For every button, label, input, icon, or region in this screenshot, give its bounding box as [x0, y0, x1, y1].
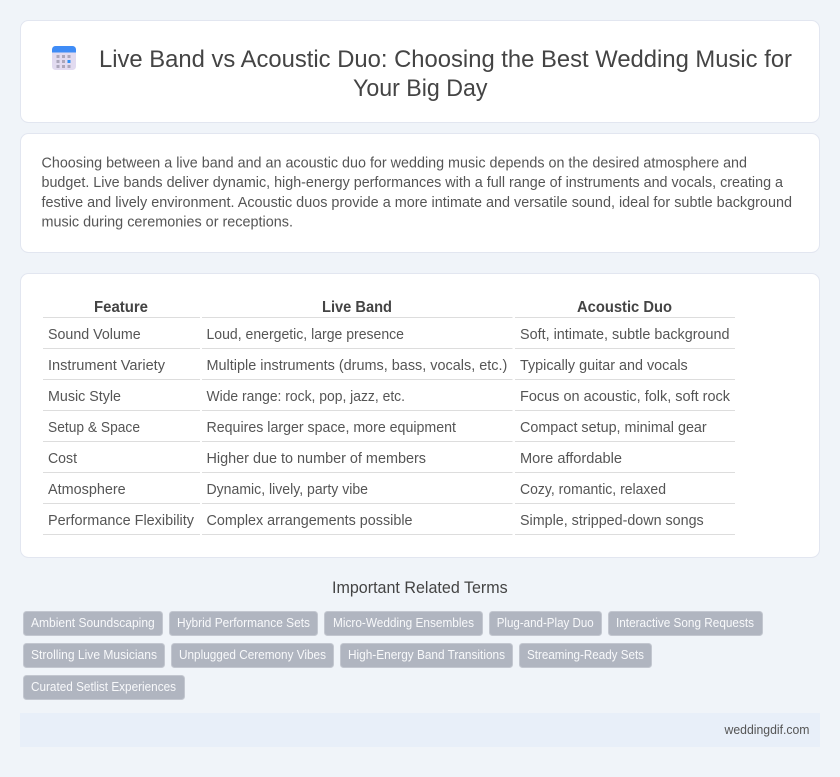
tag: strolling live musicians — [24, 644, 164, 668]
table row: music style: Focus on acoustic, folk, soft rock — [520, 389, 731, 405]
table row: cost: Cost — [48, 451, 77, 467]
table row: music style: Music Style — [48, 389, 121, 405]
tag: high-energy band transitions — [340, 644, 512, 668]
table row: setup and space — [48, 420, 707, 436]
table row: performance flexibility: Complex arrangements possible — [206, 513, 412, 529]
panel: comparison table — [20, 274, 820, 558]
title: Your Big Day — [353, 75, 488, 102]
table row: music style: Wide range: rock, pop, jazz, etc. — [206, 389, 405, 405]
table row: atmosphere: Atmosphere — [48, 482, 126, 498]
tag: curated setlist experiences — [24, 676, 184, 700]
table row: instrument variety: Instrument Variety — [48, 358, 166, 374]
table row: setup and space: Compact setup, minimal gear — [520, 420, 707, 436]
tag: micro-wedding ensembles: Micro-Wedding Ensembles — [333, 616, 474, 630]
tag: streaming-ready sets: Streaming-Ready Sets — [527, 648, 644, 662]
tag: hybrid performance sets: Hybrid Performance Sets — [177, 616, 310, 630]
tag: plug-and-play duo: Plug-and-Play Duo — [497, 616, 594, 630]
tag: hybrid performance sets — [170, 612, 318, 636]
text block: introduction paragraph: music during ceremonies or receptions. — [42, 214, 293, 230]
table header row: Acoustic Duo — [577, 299, 672, 316]
footer source text: weddingdif.com — [724, 723, 810, 737]
text block: introduction paragraph: budget. Live bands deliver dynamic, high-energy performances with a full range of instruments and vocals, creating a — [42, 175, 784, 191]
table header row: Feature — [94, 299, 148, 316]
panel: introduction — [20, 134, 820, 252]
tag: ambient soundscaping: Ambient Soundscaping — [31, 616, 155, 630]
table row: sound volume — [48, 327, 730, 343]
text block: introduction paragraph: Choosing between a live band and an acoustic duo for wedding music depends on the desired atmosphere and — [42, 156, 747, 172]
table row: instrument variety: Multiple instruments (drums, bass, vocals, etc.) — [206, 358, 507, 374]
table row: performance flexibility — [48, 513, 704, 529]
icon: calendar — [52, 46, 76, 70]
tag: micro-wedding ensembles — [324, 612, 482, 636]
table row: atmosphere: Cozy, romantic, relaxed — [520, 482, 666, 498]
table row: cost: Higher due to number of members — [206, 451, 426, 467]
table row: setup and space: Setup & Space — [48, 420, 140, 436]
table row: cost — [48, 451, 622, 467]
tag: unplugged ceremony vibes — [172, 644, 334, 668]
table row: performance flexibility: Performance Flexibility — [48, 513, 195, 529]
tag: unplugged ceremony vibes: Unplugged Ceremony Vibes — [179, 648, 326, 662]
heading: important related terms: Important Related Terms — [332, 579, 508, 597]
table row: atmosphere: Dynamic, lively, party vibe — [206, 482, 368, 498]
table row: atmosphere — [48, 482, 666, 498]
tag: curated setlist experiences: Curated Setlist Experiences — [31, 680, 176, 694]
table row: sound volume: Loud, energetic, large presence — [206, 327, 404, 343]
table row: music style — [48, 389, 731, 405]
title: Live Band vs Acoustic Duo: Choosing the Best Wedding Music for — [99, 46, 792, 73]
table row: sound volume: Sound Volume — [48, 327, 141, 343]
table row: instrument variety: Typically guitar and vocals — [520, 358, 688, 374]
tag: interactive song requests — [608, 612, 762, 636]
tag: strolling live musicians: Strolling Live Musicians — [31, 648, 157, 662]
tag: interactive song requests: Interactive Song Requests — [616, 616, 754, 630]
title — [99, 46, 792, 102]
tag: plug-and-play duo — [490, 612, 602, 636]
footer bar — [20, 713, 820, 747]
related term tags — [24, 612, 762, 700]
text block: introduction paragraph: festive and lively environment. Acoustic duos provide a more intimate and versatile sound, ideal for subtle background — [42, 195, 792, 211]
table row: sound volume: Soft, intimate, subtle background — [520, 327, 730, 343]
table header row — [94, 299, 672, 316]
table row: instrument variety — [48, 358, 688, 374]
text block: introduction paragraph — [42, 156, 792, 230]
table header row: Live Band — [322, 299, 392, 316]
tag: high-energy band transitions: High-Energy Band Transitions — [348, 648, 505, 662]
tag: streaming-ready sets — [520, 644, 652, 668]
panel: title header — [20, 20, 820, 122]
table row: setup and space: Requires larger space, more equipment — [206, 420, 456, 436]
table row: performance flexibility: Simple, stripped-down songs — [520, 513, 704, 529]
table row: cost: More affordable — [520, 451, 622, 467]
tag: ambient soundscaping — [24, 612, 162, 636]
